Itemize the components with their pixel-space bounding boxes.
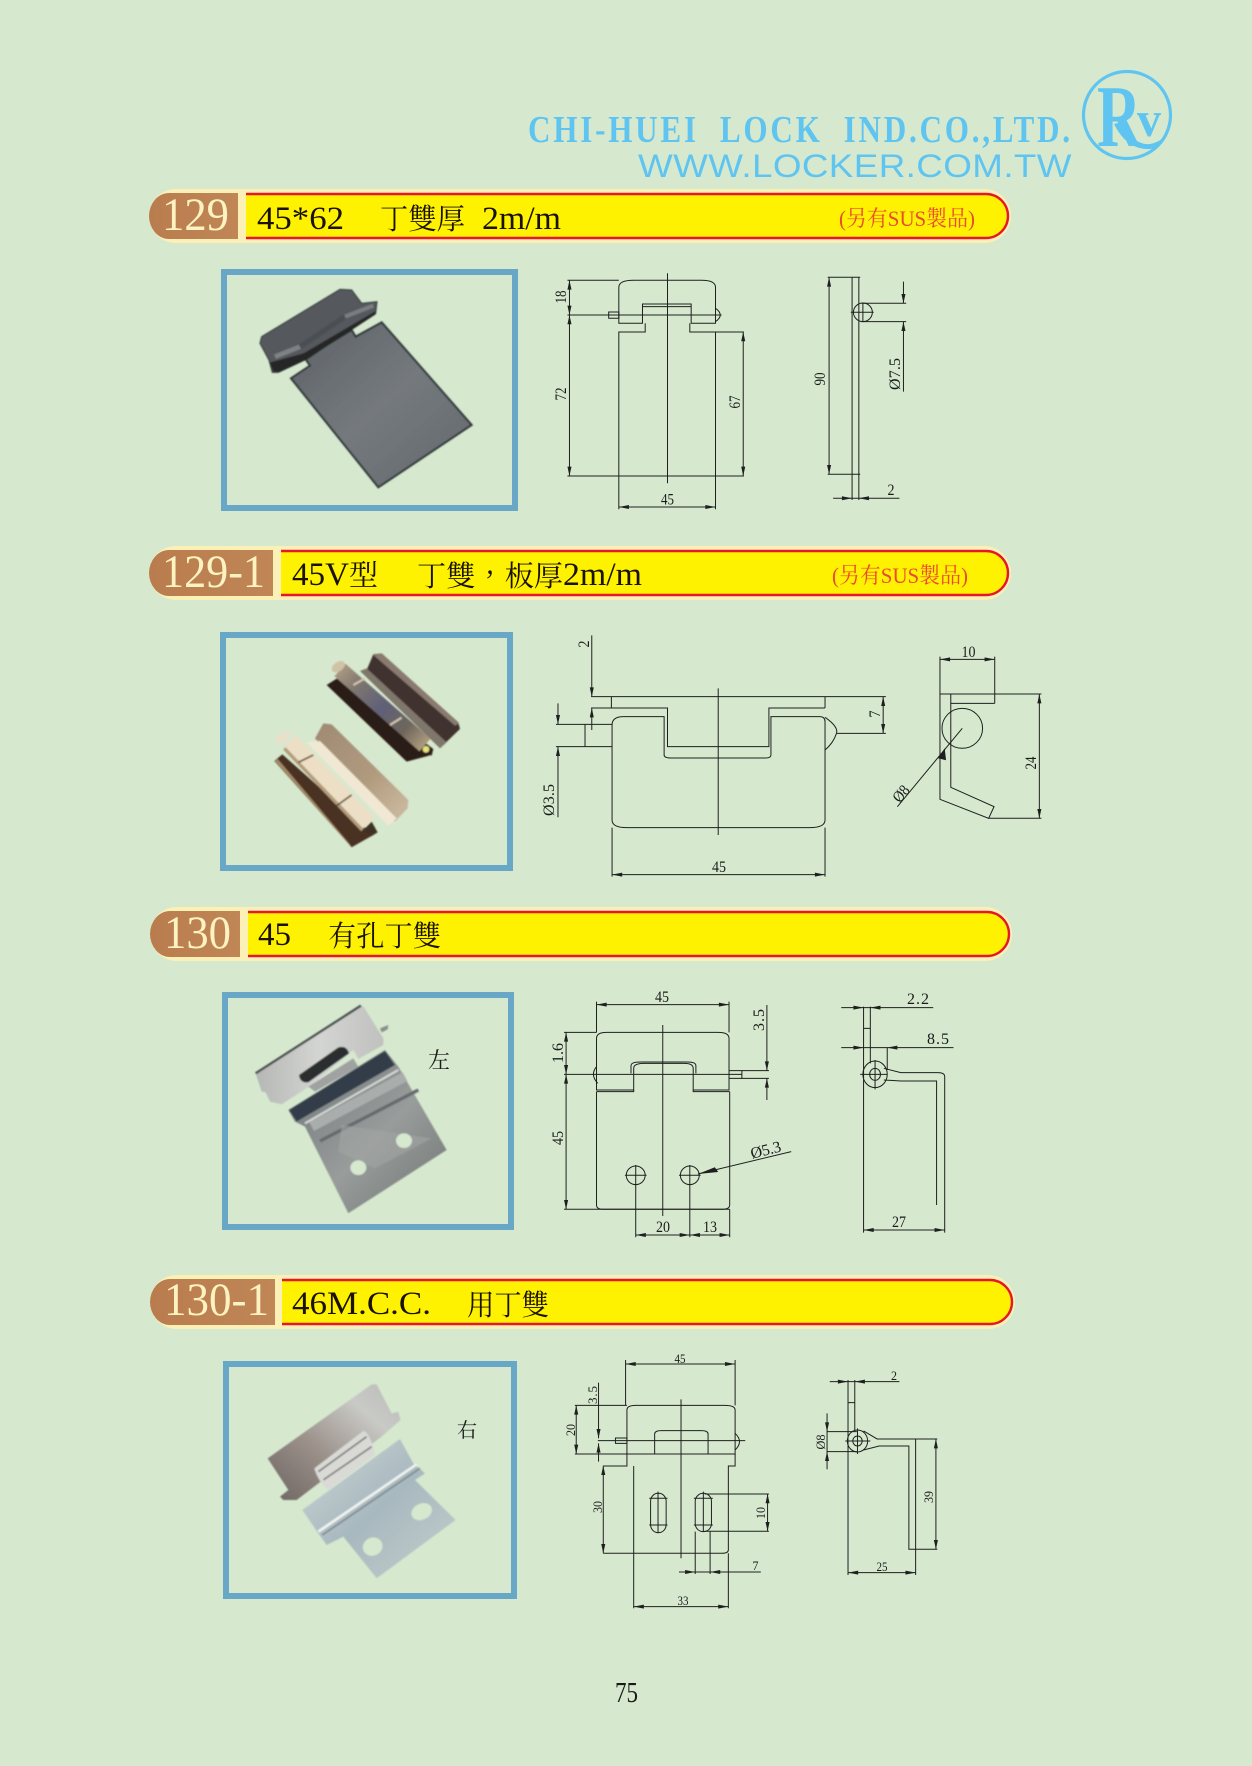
photo frame: 129 bbox=[224, 272, 515, 508]
technical drawing: 129-1: 45 bbox=[712, 859, 726, 876]
banner: 129 bbox=[149, 189, 1011, 243]
banner: 129-1: 2m/m bbox=[563, 557, 642, 593]
technical drawing: 129-1: Ø3.5 bbox=[541, 784, 558, 816]
banner: 130-1 bbox=[150, 1274, 1015, 1329]
technical drawing: 129-1: 7 bbox=[867, 710, 884, 718]
technical drawing: 129: 18 bbox=[553, 290, 570, 304]
technical drawing: 130-1: 20 bbox=[563, 1424, 578, 1436]
technical drawing: 129: Ø7.5 bbox=[887, 358, 904, 390]
technical drawing: 130-1: 25 bbox=[876, 1559, 888, 1574]
label: right: 右 bbox=[457, 1414, 477, 1443]
banner: 130: 45 bbox=[258, 917, 291, 953]
technical drawing: 130-1: 45 bbox=[674, 1351, 686, 1366]
photo frame: 130-1 bbox=[226, 1364, 514, 1596]
banner: 130 bbox=[150, 907, 1012, 961]
technical drawing: 130: Ø5.3 bbox=[749, 1139, 783, 1163]
banner: 130-1: 用丁雙 bbox=[467, 1283, 549, 1324]
photo frame: 129-1 bbox=[223, 635, 510, 868]
banner: 129: 2m/m bbox=[482, 201, 561, 237]
banner: 129: 丁雙厚 bbox=[380, 197, 465, 238]
technical drawing: 130: 20 bbox=[656, 1219, 670, 1236]
technical drawing: 130-1: 30 bbox=[590, 1501, 605, 1513]
technical drawing: 129-1 bbox=[541, 635, 1041, 877]
label: left: 左 bbox=[428, 1044, 450, 1075]
technical drawing: 129 bbox=[553, 273, 906, 509]
banner: 129-1 bbox=[149, 546, 1011, 600]
technical drawing: 130-1: 33 bbox=[678, 1593, 688, 1608]
banner: 130: 130 bbox=[164, 907, 231, 959]
banner: 129-1: 45V bbox=[292, 557, 349, 593]
photo frame: 130 bbox=[225, 995, 511, 1227]
banner: 130-1: 46M.C.C. bbox=[292, 1286, 431, 1322]
technical drawing: 130-1: 10 bbox=[753, 1507, 768, 1519]
logo: R bbox=[1097, 69, 1142, 166]
technical drawing: 129: 2 bbox=[888, 482, 894, 499]
technical drawing: 130-1: 3.5 bbox=[585, 1386, 600, 1404]
banner: 130: 有孔丁雙 bbox=[328, 914, 441, 955]
technical drawing: 129-1: Ø8 bbox=[890, 782, 914, 806]
company name: CHI-HUEI LOCK IND.CO.,LTD. bbox=[528, 108, 1070, 151]
technical drawing: 130: 45 bbox=[550, 1131, 567, 1145]
technical drawing: 129-1: 24 bbox=[1023, 756, 1040, 770]
technical drawing: 130: 13 bbox=[703, 1219, 717, 1236]
technical drawing: 129: 45 bbox=[661, 492, 674, 508]
technical drawing: 130-1: Ø8 bbox=[813, 1434, 828, 1450]
technical drawing: 130: 2.2 bbox=[907, 991, 929, 1008]
technical drawing: 129: 90 bbox=[812, 372, 829, 386]
photo: 129-1 hinges bbox=[274, 653, 460, 847]
technical drawing: 130-1 bbox=[563, 1351, 938, 1609]
technical drawing: 129-1: 10 bbox=[962, 644, 976, 661]
banner: 129-1: (另有SUS製品) bbox=[832, 563, 968, 588]
banner: 129-1: 型 bbox=[349, 553, 378, 594]
technical drawing: 130: 3.5 bbox=[751, 1009, 768, 1031]
banner: 129: 129 bbox=[162, 189, 229, 241]
banner: 130-1: 130-1 bbox=[164, 1274, 269, 1326]
banner: 129: (另有SUS製品) bbox=[839, 206, 975, 231]
technical drawing: 130: 45 bbox=[655, 989, 669, 1006]
page number: 75 bbox=[615, 1678, 638, 1709]
banner: 129: 45*62 bbox=[257, 201, 344, 237]
technical drawing: 130: 27 bbox=[892, 1214, 906, 1231]
photo: 129 hinge bbox=[260, 289, 472, 487]
logo: v bbox=[1137, 91, 1161, 147]
website: WWW.LOCKER.COM.TW bbox=[638, 149, 1072, 184]
technical drawing: 129: 67 bbox=[727, 396, 744, 408]
technical drawing: 129: 72 bbox=[553, 388, 570, 400]
technical drawing: 130: 8.5 bbox=[927, 1031, 949, 1048]
technical drawing: 130: 1.6 bbox=[550, 1043, 567, 1063]
technical drawing: 130-1: 2 bbox=[891, 1368, 897, 1383]
banner: 129-1: 丁雙，板厚 bbox=[417, 554, 563, 595]
photo: 130 hinge bbox=[256, 1005, 447, 1213]
technical drawing: 130-1: 7 bbox=[752, 1558, 759, 1573]
photo: 130-1 hinge bbox=[268, 1384, 456, 1578]
technical drawing: 129-1: 2 bbox=[576, 640, 593, 648]
banner: 129-1: 129-1 bbox=[162, 546, 265, 598]
technical drawing: 130-1: 39 bbox=[921, 1491, 936, 1503]
technical drawing: 130 bbox=[550, 989, 953, 1237]
